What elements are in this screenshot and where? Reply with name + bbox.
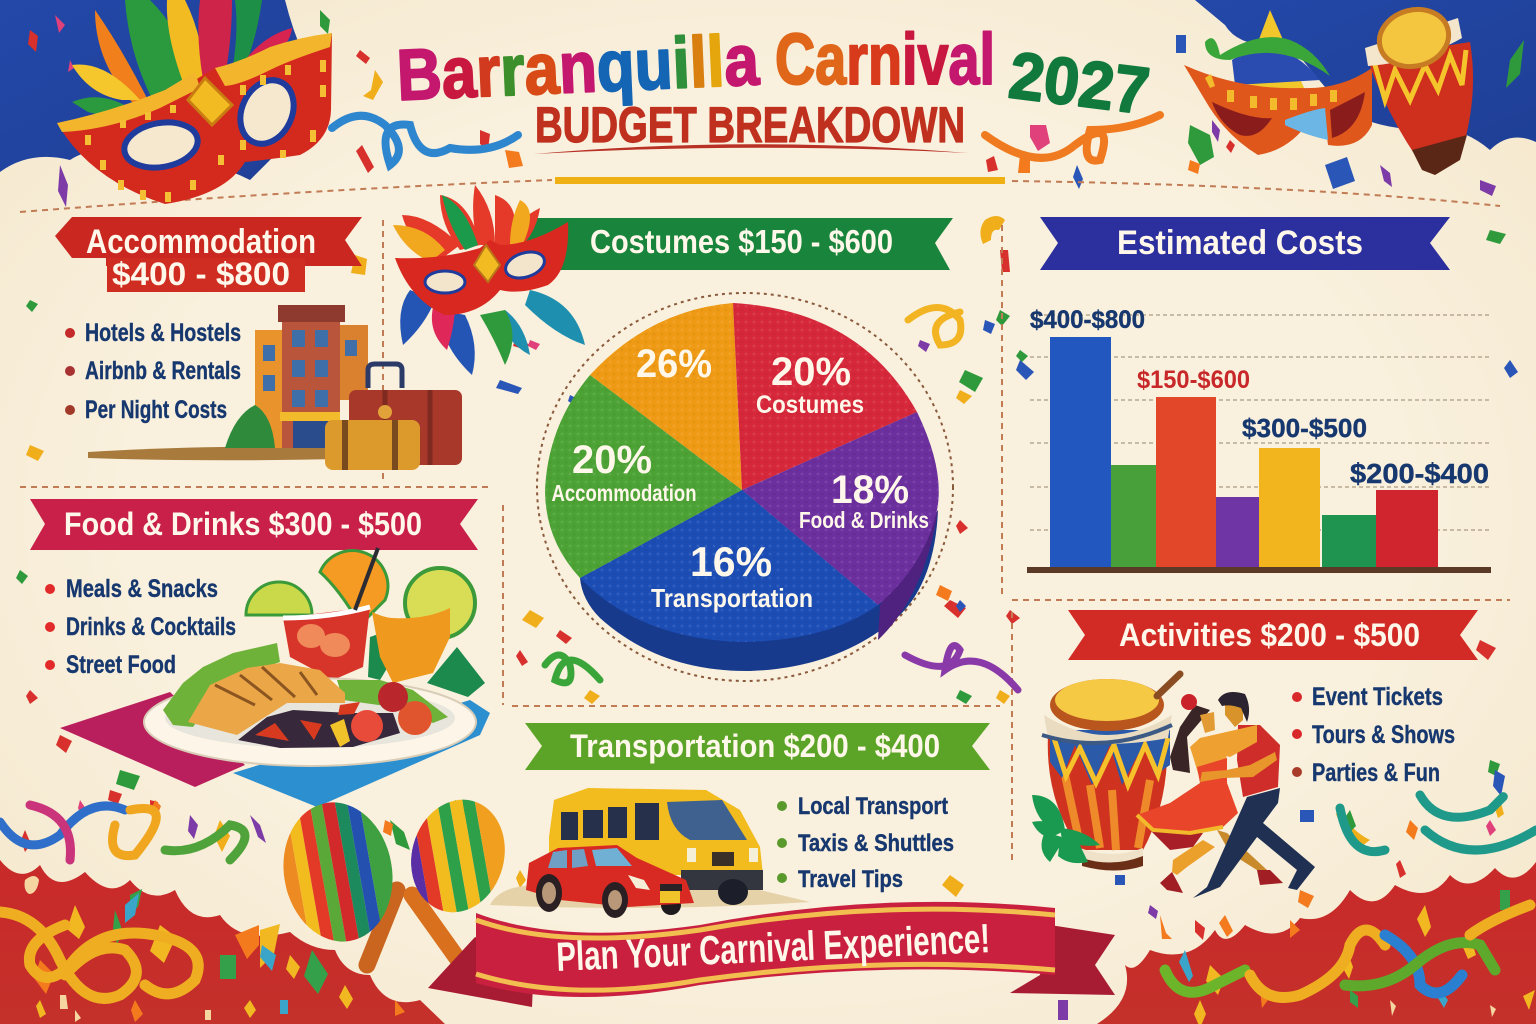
subtitle: BUDGET BREAKDOWN bbox=[535, 97, 965, 153]
icon: yellow bus bbox=[549, 788, 763, 905]
pie labels: 20% bbox=[771, 350, 851, 394]
pie side bbox=[580, 490, 938, 671]
woman's back leg bbox=[1217, 830, 1267, 872]
activities banner bbox=[1068, 610, 1478, 660]
red placemat bbox=[60, 692, 245, 787]
small mask face bbox=[395, 222, 568, 315]
drum stripes bbox=[1375, 50, 1466, 100]
accommodation list bbox=[65, 319, 241, 424]
rice and beans bbox=[238, 710, 400, 748]
lettuce bbox=[163, 643, 280, 727]
straw bbox=[355, 548, 378, 610]
subtitle underline bbox=[534, 144, 968, 154]
confetti on red bands bbox=[24, 876, 1535, 1024]
left panel: accommodation bbox=[55, 217, 462, 470]
transportation list: Taxis & Shuttles bbox=[798, 830, 954, 857]
activities list: Tours & Shows bbox=[1312, 721, 1455, 749]
food list bbox=[45, 575, 236, 679]
bottom right red band bbox=[1097, 862, 1536, 1024]
pie labels: Accommodation bbox=[552, 480, 696, 506]
activities heading: Activities $200 - $500 bbox=[1119, 617, 1420, 653]
bar value labels: $400-$800 bbox=[1030, 306, 1145, 334]
woman's back shoe bbox=[1257, 870, 1283, 885]
title line 1: Carnival: Carnival bbox=[775, 20, 995, 100]
left panel: food and drinks bbox=[30, 499, 490, 807]
accommodation list: Hotels & Hostels bbox=[85, 319, 241, 347]
woman's skirt bbox=[1137, 783, 1238, 833]
drum top bbox=[1373, 2, 1455, 74]
icon: hotel building bbox=[88, 305, 368, 460]
icon: dancers bbox=[1137, 692, 1315, 898]
ribbon bottom trim bbox=[476, 964, 1055, 990]
top right mask and hat bbox=[1184, 10, 1372, 155]
man's shirt bbox=[1237, 725, 1280, 797]
mask left eye bbox=[121, 117, 201, 173]
gridlines bbox=[1030, 315, 1490, 530]
woman's flower bbox=[1181, 694, 1197, 710]
woman's front leg bbox=[1172, 840, 1215, 875]
mask eye holes bbox=[1212, 92, 1365, 138]
leaves behind bbox=[427, 647, 485, 697]
bus grille bbox=[712, 852, 734, 866]
car body bbox=[526, 845, 694, 907]
drum leaves bbox=[1032, 795, 1100, 863]
accommodation list: Per Night Costs bbox=[85, 396, 227, 424]
pie chart bbox=[537, 293, 953, 681]
hat dome bbox=[1232, 49, 1320, 85]
bottom right swirl bbox=[1165, 905, 1530, 998]
woman's torso bbox=[1190, 738, 1227, 780]
icon: red car bbox=[526, 845, 694, 918]
woman's hair bbox=[1170, 705, 1210, 773]
mask right eye bbox=[230, 72, 304, 152]
costumes banner bbox=[525, 218, 953, 270]
lime slices bbox=[246, 582, 312, 615]
woman's underskirt bbox=[1150, 830, 1203, 850]
orange drink bbox=[372, 608, 450, 683]
small mask eyes bbox=[425, 271, 465, 293]
food list: Meals & Snacks bbox=[66, 575, 218, 603]
bar chart: $300-$500 bbox=[1242, 413, 1367, 443]
vegetables bbox=[351, 710, 383, 742]
bus wheel bbox=[718, 879, 748, 905]
drum body bbox=[1048, 735, 1167, 850]
ribbon top trim bbox=[476, 909, 1055, 938]
title year: 2027 bbox=[1005, 37, 1153, 128]
bar chart: $200-$400 bbox=[1350, 458, 1489, 489]
drum blue panels and yellow zigzag bbox=[1050, 730, 1170, 785]
drum base band bbox=[1080, 848, 1143, 863]
pie texture bbox=[545, 303, 939, 642]
car windows bbox=[548, 849, 588, 868]
bars bbox=[1050, 337, 1111, 569]
title line 1: Barranquilla: Barranquilla bbox=[395, 20, 761, 116]
icon: conga drum bbox=[1032, 674, 1180, 870]
dashed section dividers bbox=[20, 180, 1510, 860]
transportation list: Local Transport bbox=[798, 793, 948, 820]
man's head and hair bbox=[1225, 702, 1243, 727]
small mask gem bbox=[474, 245, 500, 282]
transportation heading: Transportation $200 - $400 bbox=[570, 728, 940, 764]
grilled bread bbox=[188, 663, 345, 735]
pie dashed ring bbox=[537, 293, 953, 681]
orange mask bbox=[1184, 65, 1372, 155]
man's arm bbox=[1200, 752, 1277, 782]
accommodation list: Airbnb & Rentals bbox=[85, 357, 241, 385]
left streamer bbox=[0, 795, 1536, 860]
blue placemat bbox=[233, 700, 490, 807]
transportation banner bbox=[525, 723, 990, 770]
woman's arm bbox=[1200, 725, 1257, 757]
slice: accommodation bbox=[545, 375, 742, 578]
top right blue corner bbox=[1195, 0, 1536, 150]
slice: 26 percent bbox=[590, 303, 742, 490]
food list: Drinks & Cocktails bbox=[66, 613, 236, 641]
ribbon right tail bbox=[1010, 925, 1115, 995]
bottom ribbon bbox=[428, 902, 1115, 1007]
icon: maracas bbox=[283, 800, 505, 974]
slice: transportation bbox=[580, 490, 878, 642]
drum rim bbox=[1044, 715, 1172, 744]
bus windshield bbox=[667, 800, 747, 840]
hat green band bbox=[1205, 37, 1330, 76]
woman's front shoe bbox=[1160, 872, 1183, 893]
left maraca bbox=[283, 802, 393, 942]
pie labels bbox=[552, 342, 929, 613]
large carnival mask bbox=[57, 0, 332, 204]
mask gold studs bbox=[1205, 74, 1337, 110]
mask blue gap bbox=[1285, 108, 1328, 140]
pie labels: Costumes bbox=[756, 391, 864, 419]
bar chart: $150-$600 bbox=[1137, 366, 1250, 394]
accommodation price: $400 - $800 bbox=[112, 256, 290, 292]
center panel: transportation bbox=[490, 723, 990, 918]
pie labels: 18% bbox=[831, 468, 909, 512]
mask gold trim bbox=[57, 33, 332, 132]
drum stick bbox=[1157, 674, 1180, 696]
plate bbox=[144, 678, 476, 766]
drum foot bbox=[1082, 856, 1143, 870]
transportation list bbox=[777, 793, 954, 893]
decorative streamers around pie bbox=[545, 308, 1018, 690]
mask center gem bbox=[188, 78, 232, 125]
car plate and grille bbox=[660, 884, 682, 891]
accommodation heading: Accommodation bbox=[86, 223, 316, 261]
yellow rule bbox=[555, 177, 1005, 184]
title bbox=[395, 20, 1153, 184]
drum body bbox=[1367, 42, 1473, 170]
drum foot bbox=[1412, 135, 1467, 175]
bus headlights bbox=[687, 848, 758, 862]
panel: activities bbox=[1032, 610, 1478, 898]
ground shadow bbox=[490, 885, 810, 908]
costumes heading: Costumes $150 - $600 bbox=[590, 223, 893, 260]
activities list bbox=[1292, 683, 1455, 787]
ribbon text: Plan Your Carnival Experience! bbox=[555, 915, 991, 980]
food list: Street Food bbox=[66, 651, 176, 679]
car headlight bbox=[628, 875, 650, 890]
activities list: Event Tickets bbox=[1312, 683, 1443, 711]
icon: suitcases bbox=[325, 364, 462, 470]
food heading: Food & Drinks $300 - $500 bbox=[64, 506, 422, 542]
top left blue corner bbox=[0, 0, 330, 180]
man's trousers bbox=[1193, 788, 1315, 898]
woman's head bbox=[1200, 712, 1215, 733]
right maraca bbox=[411, 800, 505, 912]
bus bumper bbox=[681, 870, 763, 890]
bus body bbox=[549, 788, 763, 875]
car wheels behind bbox=[661, 895, 681, 915]
pie labels: Food & Drinks bbox=[799, 507, 929, 533]
pie labels: 16% bbox=[690, 538, 772, 585]
feathers bbox=[72, 0, 292, 135]
bar chart bbox=[1027, 306, 1491, 573]
maraca handles bbox=[367, 890, 397, 965]
streamers by title bbox=[332, 115, 1160, 165]
pie labels: 20% bbox=[572, 438, 652, 482]
ribbon body bbox=[476, 902, 1055, 997]
accommodation price ribbon bbox=[107, 258, 305, 292]
axis bbox=[1027, 567, 1491, 573]
estimated costs banner bbox=[1040, 217, 1450, 270]
small mask icon bbox=[393, 185, 585, 375]
bottom left red band bbox=[0, 860, 445, 1024]
slice: food and drinks bbox=[742, 412, 939, 605]
center panel: costumes bbox=[393, 185, 953, 375]
bus windows bbox=[561, 803, 659, 840]
pie labels: 26% bbox=[636, 342, 712, 386]
panel: estimated costs bbox=[1027, 217, 1491, 573]
drum skin bbox=[1050, 679, 1164, 731]
bottom left swirl bbox=[0, 912, 198, 998]
ribbon left tail bbox=[428, 937, 534, 1007]
transportation list: Travel Tips bbox=[798, 866, 903, 893]
food illustration bbox=[60, 548, 490, 807]
estimated costs heading: Estimated Costs bbox=[1117, 224, 1363, 262]
top right conga drum bbox=[1365, 2, 1473, 175]
accommodation banner bbox=[55, 217, 362, 266]
hat cone bbox=[1240, 10, 1305, 90]
car wheels bbox=[536, 874, 562, 912]
slice: costumes bbox=[733, 303, 917, 490]
activities list: Parties & Fun bbox=[1312, 759, 1440, 787]
mask face bbox=[57, 33, 332, 204]
food banner bbox=[30, 499, 478, 550]
pie labels: Transportation bbox=[651, 583, 813, 613]
mask gold studs bbox=[85, 60, 326, 202]
red drink bbox=[283, 607, 370, 680]
drum rim bbox=[1365, 18, 1462, 66]
small mask feathers bbox=[402, 185, 540, 260]
